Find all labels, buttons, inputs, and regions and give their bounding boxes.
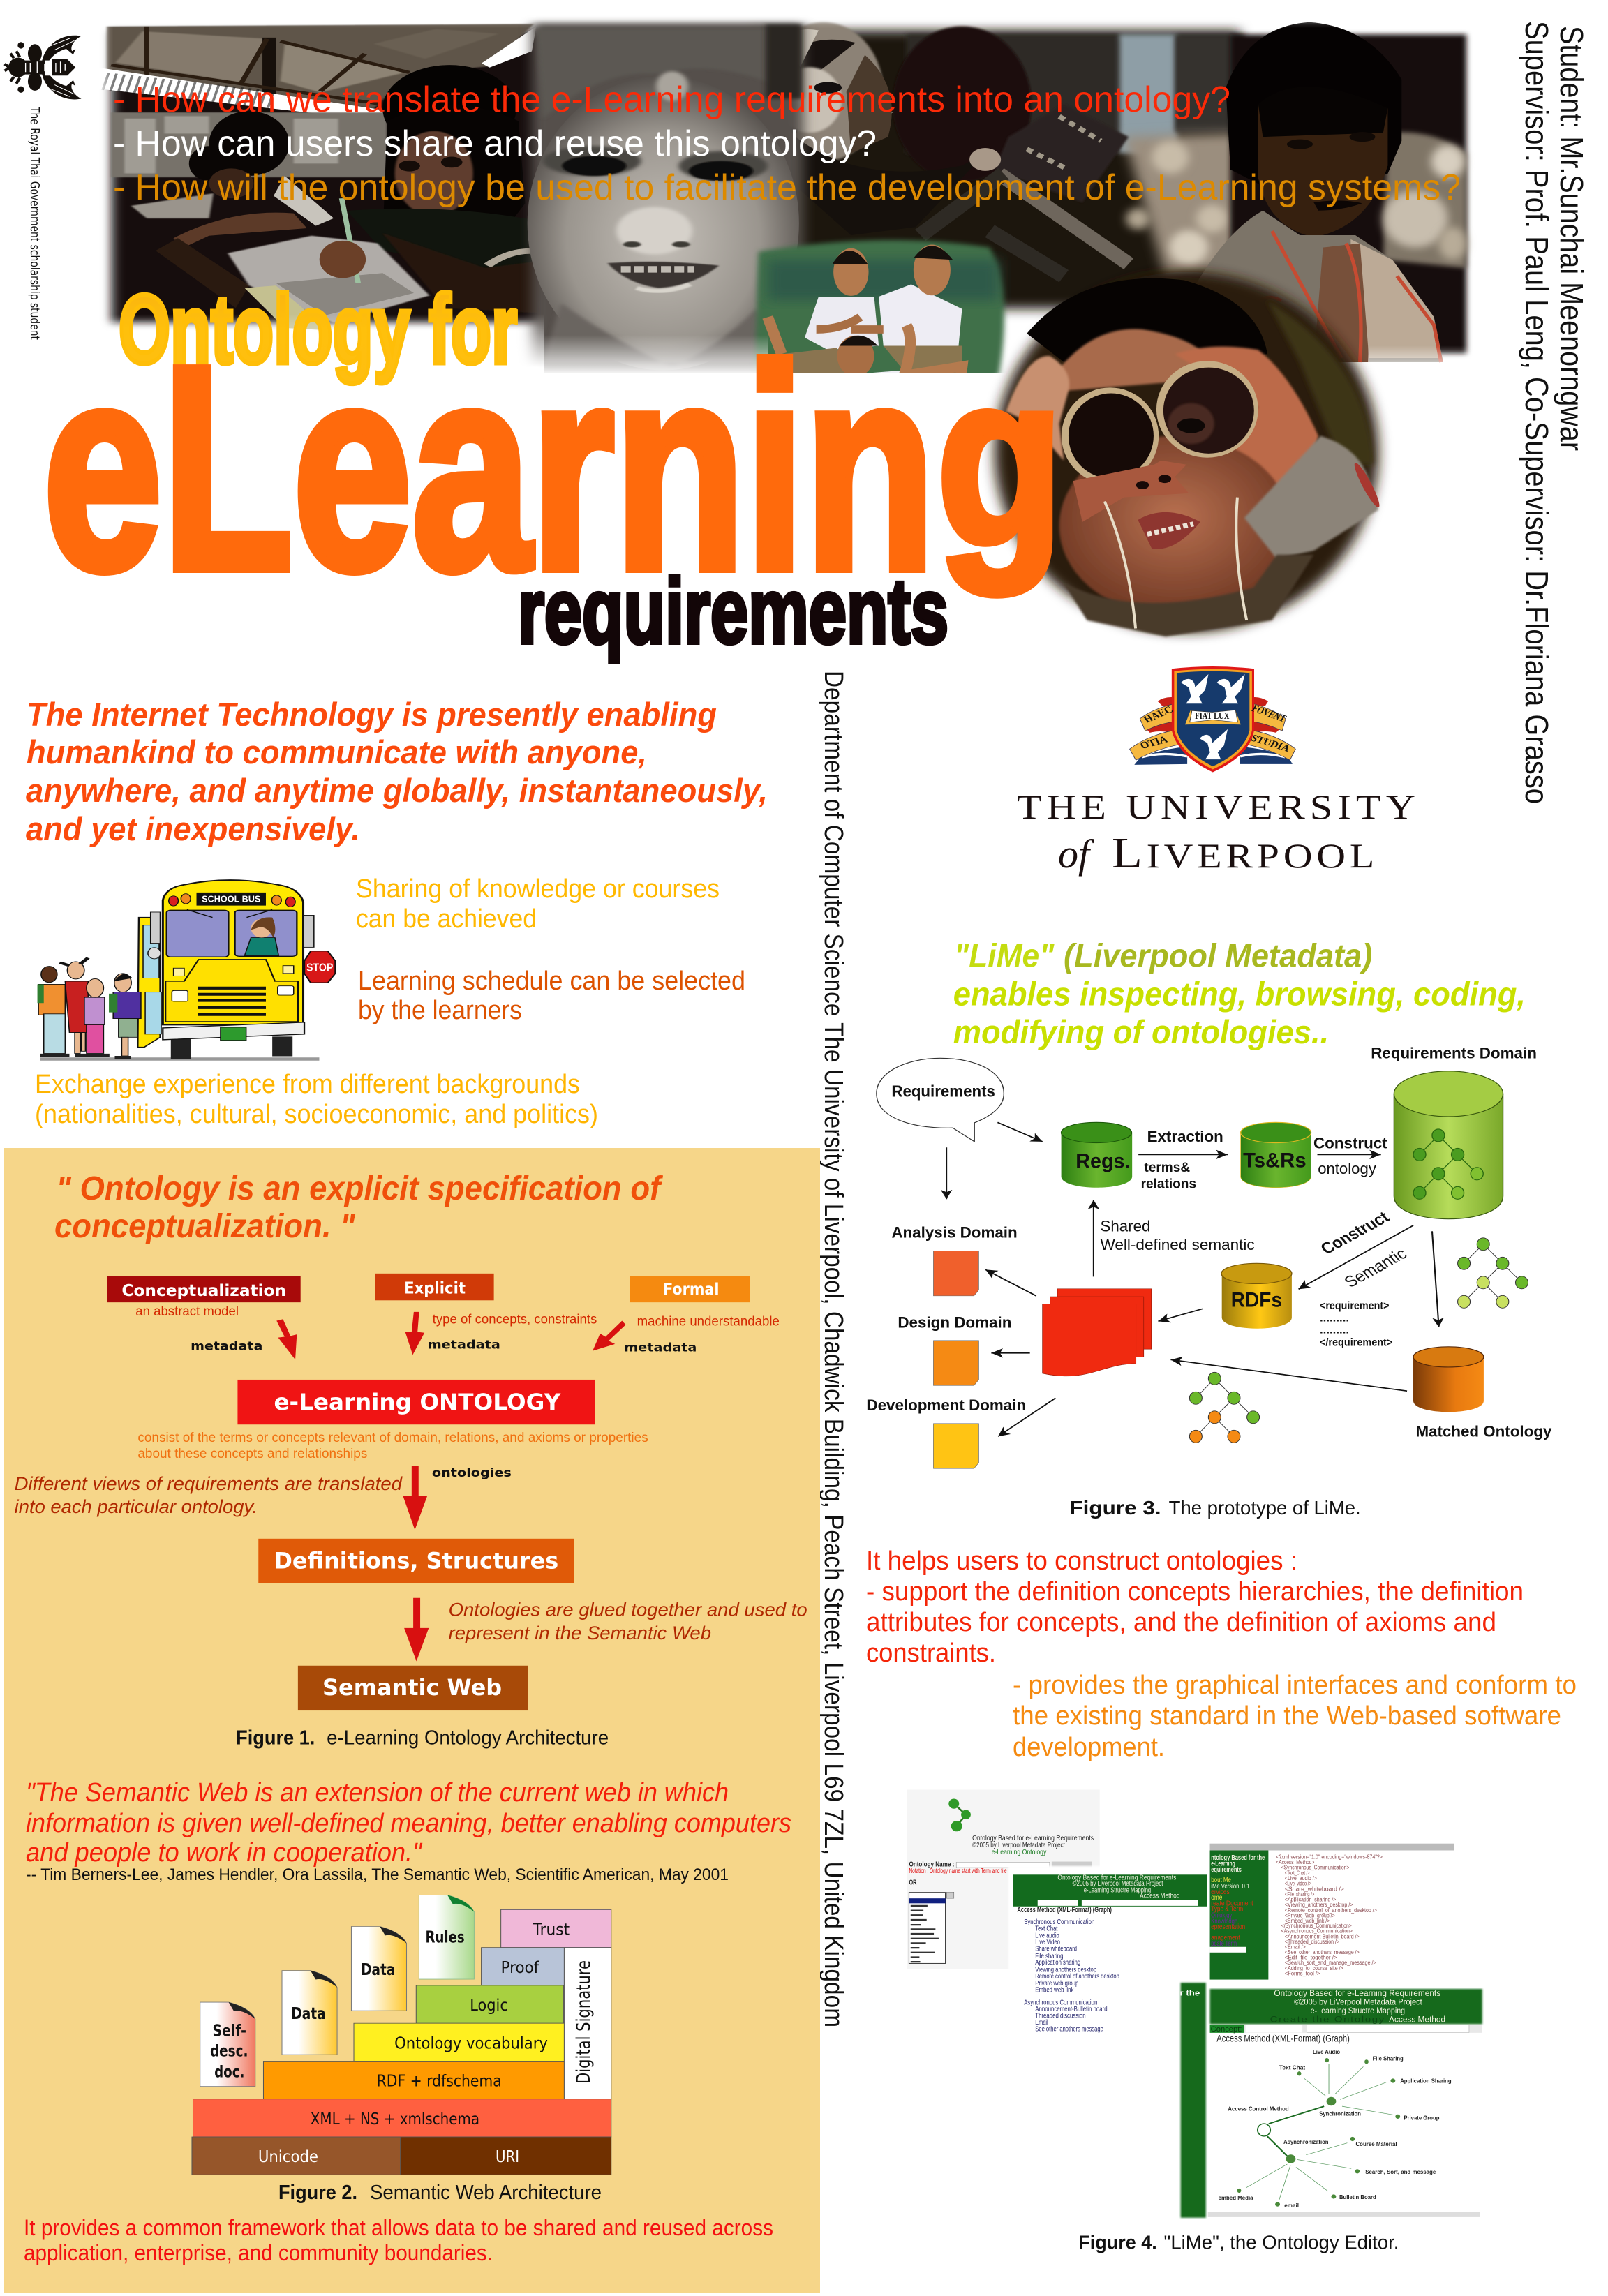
RDF snippet: .........	[1320, 1323, 1349, 1336]
RDF snippet: <requirement>	[1320, 1299, 1389, 1312]
heading: LiMe: modifying of ontologies..	[953, 1014, 1329, 1051]
screenshot: access method list: Threaded discussion	[1035, 2011, 1086, 2020]
benefit: sharing: can be achieved	[356, 904, 537, 934]
screenshot: ontology graph: ©2005 by LiVerpool Metadata Project	[1294, 1997, 1422, 2006]
photo: child with cardboard binoculars	[995, 272, 1383, 636]
screenshot: XML source: anagement	[1211, 1935, 1240, 1941]
intro statement	[26, 696, 768, 847]
metadata labels: ontologies	[432, 1466, 512, 1479]
notes: an abstract model	[135, 1303, 239, 1318]
question: facilitate development: - How will the ontology be used to facilitate the development of e-Learning systems?	[113, 167, 1461, 208]
screenshot: access method list: Email	[1035, 2018, 1048, 2027]
photo: smiling child in the centre	[528, 22, 803, 375]
RDF snippet: .........	[1320, 1311, 1349, 1324]
screenshot: ontology graph: Bulletin Board	[1339, 2194, 1376, 2200]
screenshot: XML source: <Access_Method>	[1276, 1859, 1315, 1866]
screenshot: access method list: Access Method	[1140, 1893, 1179, 1900]
heading: ontology definition: conceptualization. "	[54, 1208, 356, 1245]
intro statement: humankind to communicate with anyone,	[27, 733, 647, 770]
screenshot: XML source: <Edit_file_together />	[1285, 1955, 1337, 1961]
heading: ontology definition: " Ontology is an explicit specification of	[56, 1170, 663, 1207]
screenshot: XML source: Type & Term	[1211, 1906, 1243, 1913]
benefit: schedule: Learning schedule can be selected	[358, 967, 745, 996]
icon: coat of arms	[1130, 666, 1295, 772]
document: data: Data	[361, 1960, 395, 1979]
callout: requirements	[877, 1058, 1004, 1142]
box: definitions, structures: Definitions, Structures	[274, 1548, 558, 1574]
screenshot: XML source: <Adding_to_course_site />	[1285, 1965, 1343, 1971]
author line: student: Student: Mr.Sunchai Meenorngwar	[1554, 26, 1590, 451]
text: helps users construct ontologies: - support the definition concepts hierarchies, the definition	[866, 1577, 1524, 1607]
layers	[192, 1909, 611, 2175]
metadata labels: metadata	[624, 1341, 697, 1355]
illustration: school bus and children: SCHOOL BUS	[202, 894, 260, 904]
document: data	[351, 1926, 406, 2011]
photo: boys group on green background	[754, 240, 1004, 411]
caption: figure 1: Figure 1.	[236, 1727, 315, 1749]
box: e-Learning ontology	[237, 1380, 595, 1424]
wordmark: the university: THE UNIVERSITY	[1017, 787, 1420, 826]
benefit: exchange experience: Exchange experience from different backgrounds	[35, 1070, 580, 1099]
rotated label: semantic: Semantic	[1341, 1245, 1410, 1291]
cylinder: terms and relations: Ts&Rs	[1243, 1149, 1306, 1172]
screenshot: access method list: Live audio	[1035, 1931, 1059, 1939]
screenshot: XML source: <Forms_tool />	[1285, 1970, 1320, 1977]
screenshot: ontology graph: File Sharing	[1373, 2056, 1404, 2062]
panel: ontology and semantic web	[4, 1148, 820, 2293]
figure 4: LiMe editor screenshots	[907, 1790, 1482, 2253]
screenshot: XML source: <Share_whiteboard />	[1285, 1886, 1344, 1893]
intro statement: and yet inexpensively.	[26, 810, 360, 847]
regular labels: ontology	[1318, 1160, 1376, 1177]
screenshot: ontology graph: Asynchronization	[1283, 2139, 1329, 2145]
text: helps users construct ontologies	[866, 1546, 1524, 1668]
caption: figure 2: Figure 2.	[278, 2182, 357, 2204]
author line: supervisors: Supervisor: Prof. Paul Leng, Co-Supervisor: Dr.Floriana Grasso	[1519, 21, 1555, 804]
tree: semantic	[1458, 1238, 1528, 1308]
screenshot: ontology graph: Course Material	[1355, 2141, 1397, 2147]
layer labels: Trust	[533, 1921, 570, 1939]
screenshot: access method list: See other anothers message	[1035, 2025, 1103, 2033]
screenshot: ontology graph: Search, Sort, and message	[1365, 2169, 1436, 2175]
screenshot: ontology graph: Access Control Method	[1228, 2105, 1289, 2112]
intro statement: The Internet Technology is presently enabling	[27, 696, 717, 733]
document: self-desc	[200, 2002, 255, 2087]
intro statement: anywhere, and anytime globally, instantaneously,	[26, 772, 768, 809]
regular labels	[1101, 1160, 1376, 1254]
RDF snippet: </requirement>	[1320, 1336, 1392, 1348]
children	[38, 984, 65, 1015]
page: design domain	[933, 1341, 978, 1385]
screenshot: XML source: <?xml version="1.0" encoding="windows-874"?>	[1276, 1854, 1383, 1861]
caption: figure 2: Semantic Web Architecture	[370, 2182, 602, 2204]
screenshot: XML source: Knowledge	[1211, 1918, 1237, 1925]
benefit: sharing	[356, 874, 720, 934]
bus body	[163, 880, 304, 1024]
icon: coat of arms: FOVENT	[1250, 703, 1288, 724]
layer labels: URI	[496, 2147, 519, 2166]
box: e-Learning ontology: e-Learning ONTOLOGY	[274, 1389, 561, 1415]
box: formal	[630, 1276, 750, 1302]
page: analysis domain	[933, 1251, 978, 1296]
screenshot: ontology graph: Concept:	[1211, 2025, 1242, 2034]
screenshot: XML source: <File_sharing />	[1285, 1891, 1315, 1898]
screenshot: XML source: <Live_audio />	[1285, 1875, 1317, 1881]
cylinder: requirements domain	[1394, 1071, 1503, 1219]
screenshot: access method list: Live Video	[1035, 1938, 1060, 1946]
layer label: digital signature: Digital Signature	[573, 1960, 595, 2084]
screenshot: ontology graph: email	[1284, 2202, 1299, 2209]
screenshot: access method list: Access Method (XML-Format) (Graph)	[1017, 1905, 1112, 1914]
graph edges	[1246, 2064, 1394, 2200]
screenshot: XML source: </Synchronous_Communication>	[1281, 1923, 1352, 1930]
screenshot: access method list: e-Learning Structre Mapping	[1084, 1886, 1151, 1894]
layer labels: Logic	[470, 1996, 508, 2015]
caption: figure 4: Figure 4.	[1078, 2231, 1157, 2253]
benefit: exchange experience	[35, 1070, 598, 1129]
University of Liverpool logo	[1017, 666, 1420, 877]
screenshot: ontology graph: Text Chat	[1279, 2065, 1305, 2071]
document: self-desc: Self-	[213, 2021, 246, 2040]
screenshot: access method list: File sharing	[1035, 1951, 1063, 1960]
note: ontologies glued: represent in the Semantic Web	[449, 1622, 711, 1643]
document: self-desc: doc.	[214, 2062, 244, 2082]
diagram labels: Requirements Domain	[1371, 1045, 1537, 1062]
screenshot: ontology graph: embed Media	[1219, 2195, 1253, 2201]
box: explicit: Explicit	[404, 1279, 466, 1297]
diagram labels: relations	[1141, 1177, 1196, 1191]
screenshot: XML source	[1210, 1838, 1454, 1980]
screenshot: start page: OR	[909, 1879, 916, 1886]
semantic web quote	[26, 1778, 791, 1868]
photo: camera child and dark middle	[754, 22, 1244, 309]
bus door	[137, 918, 161, 1048]
illustration: school bus and children	[38, 880, 335, 1061]
screenshot: ontology graph: Access Method	[1389, 2015, 1445, 2024]
screenshot: access method list: Synchronous Communication	[1024, 1918, 1094, 1926]
screenshot: XML source: ntology Based for the	[1211, 1854, 1265, 1861]
document: self-desc: desc.	[210, 2042, 248, 2061]
ontology description: consist of the terms or concepts relevant of domain, relations, and axioms or properties	[137, 1429, 648, 1445]
screenshot: ontology graph: Private Group	[1404, 2115, 1440, 2121]
diagram labels: terms&	[1144, 1160, 1190, 1175]
layer labels: RDF + rdfschema	[377, 2072, 502, 2091]
screenshot: XML source: <Synchronous_Communication>	[1281, 1865, 1350, 1871]
diagram labels: Design Domain	[898, 1314, 1011, 1332]
wordmark: of liverpool: of	[1058, 831, 1094, 877]
illustration: school bus and children: STOP	[306, 961, 333, 974]
title: eLearning: g	[937, 324, 1064, 596]
screenshot: ontology graph: r the	[1180, 1989, 1200, 1997]
title: eLearning: eLearnin	[43, 306, 935, 629]
arrows	[946, 1122, 1439, 1436]
icon: coat of arms: STUDIA	[1249, 732, 1292, 754]
figure 2: semantic web layer cake	[192, 1895, 611, 2175]
screenshot: start page: Ontology Name :	[909, 1861, 954, 1868]
callout: requirements: Requirements	[891, 1082, 995, 1101]
screenshot: XML source: Ontology	[1211, 1912, 1232, 1919]
heading: LiMe	[953, 938, 1526, 1051]
text: helps users construct ontologies: constraints.	[866, 1639, 996, 1668]
tree: matched	[1189, 1372, 1260, 1443]
label: scholarship: The Royal Thai Government scholarship student	[27, 106, 42, 340]
title: Ontology for: Ontology for	[119, 274, 517, 384]
screenshot: XML source: ome	[1211, 1894, 1222, 1902]
screenshot: ontology graph: Application Sharing	[1400, 2078, 1452, 2084]
cylinder: RDFs	[1221, 1263, 1292, 1329]
note: ontologies glued: Ontologies are glued together and used to	[449, 1599, 807, 1620]
diagram labels: Construct	[1313, 1135, 1387, 1152]
screenshot: start page: Ontology Based for e-Learning Requirements	[972, 1835, 1094, 1842]
screenshot: start page	[907, 1790, 1100, 1969]
page: development domain	[933, 1424, 978, 1468]
screenshot: access method list: Text Chat	[1035, 1924, 1058, 1932]
screenshot: XML source: reate Document	[1211, 1900, 1253, 1907]
caption: figure 4: "LiMe", the Ontology Editor.	[1164, 2231, 1399, 2253]
screenshot: ontology graph	[1178, 1981, 1482, 2218]
wordmark: of liverpool: LIVERPOOL	[1112, 830, 1378, 877]
text: helps users construct ontologies: It helps users to construct ontologies :	[866, 1546, 1297, 1576]
note: different views: Different views of requirements are translated	[15, 1473, 403, 1494]
icon: Thai Garuda emblem	[5, 36, 82, 99]
screenshot: XML source: <Threaded_discussion />	[1285, 1939, 1339, 1945]
screenshot: XML source: <Live_video />	[1285, 1881, 1311, 1887]
icon: coat of arms: OTIA	[1138, 733, 1170, 751]
cylinder: matched ontology	[1413, 1347, 1484, 1412]
diagram labels: Analysis Domain	[891, 1224, 1018, 1242]
stack of red documents	[1043, 1289, 1152, 1376]
icon: coat of arms: HAEC	[1141, 703, 1175, 725]
arrows to ontology	[276, 1312, 626, 1359]
heading: ontology definition	[54, 1170, 663, 1245]
caption: figure 4	[1078, 2231, 1399, 2253]
ontology description	[137, 1429, 648, 1461]
screenshot: access method list: Share whiteboard	[1035, 1944, 1077, 1953]
layer labels: Proof	[501, 1958, 539, 1977]
RDF snippet	[1320, 1299, 1392, 1348]
screenshot: XML source: <Embed_web_link />	[1285, 1918, 1330, 1925]
diagram labels	[866, 1045, 1551, 1440]
soft white feathering of photo edges	[77, 0, 1535, 436]
screenshot: access method list: ©2005 by Liverpool Metadata Project	[1073, 1880, 1163, 1888]
screenshot: start page: e-Learning Ontology	[992, 1849, 1047, 1856]
screenshot: ontology graph: Create the Ontology	[1270, 2015, 1385, 2024]
figure 3: LiMe prototype	[866, 938, 1551, 1519]
benefit: exchange experience: (nationalities, cultural, socioeconomic, and politics)	[35, 1100, 598, 1129]
semantic web quote: and people to work in cooperation."	[26, 1838, 422, 1868]
tree in cylinder	[1413, 1129, 1483, 1199]
layer labels: Ontology vocabulary	[394, 2034, 548, 2052]
metadata labels: metadata	[191, 1339, 262, 1353]
ontology description: about these concepts and relationships	[137, 1445, 367, 1461]
caption: figure 3: Figure 3.	[1069, 1497, 1161, 1519]
layer labels	[258, 1921, 570, 2166]
screenshot: start page: Notation : Ontology name start with Term and file	[909, 1868, 1007, 1875]
screenshot: ontology graph: e-Learning Structre Mapping	[1311, 2006, 1405, 2015]
text: graphical interfaces: - provides the graphical interfaces and conform to	[1013, 1671, 1577, 1700]
caption: figure 2	[278, 2182, 602, 2204]
notes: machine understandable	[637, 1313, 780, 1329]
screenshot: ontology graph: Live Audio	[1313, 2049, 1340, 2055]
document: rules	[419, 1895, 474, 1979]
text: graphical interfaces: development.	[1013, 1733, 1165, 1762]
arrow down to semantic web	[404, 1598, 429, 1661]
box: explicit	[375, 1274, 494, 1300]
screenshot: access method list: Asynchronous Communication	[1024, 1998, 1097, 2006]
screenshot: ontology graph: Ontology Based for e-Learning Requirements	[1274, 1988, 1440, 1997]
statement: common framework	[24, 2215, 773, 2265]
cylinder: RDFs: RDFs	[1231, 1288, 1282, 1311]
box: formal: Formal	[663, 1281, 719, 1299]
screenshot: XML source: pdate Term	[1211, 1940, 1237, 1948]
screenshot: XML source: iMe Version. 0.1	[1211, 1883, 1249, 1891]
regular labels: Shared	[1101, 1218, 1150, 1235]
screenshot: start page: ©2005 by Liverpool Metadata Project	[972, 1842, 1065, 1849]
metadata labels: metadata	[428, 1338, 500, 1352]
screenshot: access method list: Remote control of anothers desktop	[1035, 1972, 1119, 1981]
question: share and reuse: - How can users share and reuse this ontology?	[113, 124, 877, 164]
screenshot: XML source: ervices	[1211, 1888, 1230, 1896]
photo: girl at right	[1191, 22, 1466, 362]
title: requirements: requirements	[518, 560, 948, 662]
caption: figure 3	[1069, 1497, 1361, 1519]
screenshot: XML source: equirements	[1211, 1866, 1242, 1873]
text: graphical interfaces: the existing standard in the Web-based software	[1013, 1701, 1561, 1731]
screenshot: access method list: Viewing anothers desktop	[1035, 1965, 1096, 1974]
figure 1: e-Learning ontology architecture	[15, 1170, 807, 1749]
semantic web quote: information is given well-defined meaning, better enabling computers	[26, 1809, 791, 1838]
notes: type of concepts, constraints	[433, 1311, 597, 1327]
document: rules: Rules	[426, 1928, 465, 1947]
screenshot: XML source: <Asynchronous_Communication>	[1281, 1928, 1353, 1935]
box: semantic web	[298, 1666, 528, 1710]
semantic web quote: "The Semantic Web is an extension of the current web in which	[26, 1778, 729, 1807]
caption: figure 1: e-Learning Ontology Architecture	[327, 1727, 609, 1749]
screenshot: access method list	[1008, 1866, 1212, 2043]
screenshot: XML source: <Email />	[1285, 1944, 1306, 1951]
hood and grille	[165, 960, 298, 1022]
box: conceptualization	[107, 1276, 301, 1302]
heading: LiMe: (Liverpool Metadata)	[1064, 938, 1372, 974]
text: graphical interfaces	[1013, 1671, 1577, 1762]
metadata labels	[191, 1338, 697, 1479]
box: definitions, structures	[258, 1539, 574, 1583]
screenshot: XML source: epresentation	[1211, 1923, 1245, 1930]
screenshot: access method list: Private web group	[1035, 1979, 1079, 1988]
screenshot: XML source: bout Me	[1211, 1877, 1231, 1884]
text: helps users construct ontologies: attributes for concepts, and the definition of axioms and	[866, 1608, 1496, 1637]
diagram labels: Matched Ontology	[1415, 1423, 1551, 1440]
note: different views	[15, 1473, 403, 1517]
screenshot: XML source: <Remote_control_of_anothers_desktop />	[1285, 1907, 1377, 1914]
statement: common framework: It provides a common framework that allows data to be shared and reused across	[24, 2215, 773, 2240]
cylinder: regs: Regs.	[1075, 1149, 1130, 1172]
bumper and wheels	[171, 1039, 191, 1059]
screenshot: ontology graph: Access Method (XML-Format) (Graph)	[1216, 2034, 1350, 2044]
stop sign	[304, 951, 335, 983]
screenshot: access method list: Application sharing	[1035, 1958, 1080, 1967]
notes	[135, 1303, 780, 1329]
screenshot: XML source: <Search_sort_and_manage_message />	[1285, 1960, 1376, 1967]
layer labels: Unicode	[258, 2147, 318, 2166]
document: data	[282, 1971, 337, 2055]
photo: classroom, children writing	[98, 24, 547, 330]
cylinder: regs	[1062, 1122, 1132, 1188]
cylinder: terms and relations	[1241, 1122, 1311, 1188]
icon: coat of arms: FIAT LUX	[1195, 710, 1229, 721]
document: data: Data	[291, 2004, 326, 2023]
screenshot: XML source: <Text_Chat />	[1285, 1870, 1310, 1877]
screenshot: XML source: <Announcement-Bulletin_board />	[1285, 1933, 1360, 1940]
citation: -- Tim Berners-Lee, James Hendler, Ora Lassila, The Semantic Web, Scientific American, May 2001	[26, 1865, 729, 1884]
layer labels: XML + NS + xmlschema	[311, 2110, 479, 2129]
department address: Department of Computer Science The University of Liverpool, Chadwick Building, Peach Street, Liverpool L69 7ZL, United Kingdom	[819, 671, 848, 2027]
benefit: schedule: by the learners	[358, 996, 522, 1025]
box: semantic web: Semantic Web	[322, 1675, 502, 1701]
screenshot: XML source: e-Learning	[1211, 1861, 1235, 1868]
screenshot: XML source: <Viewing_anothers_desktop />	[1285, 1902, 1353, 1909]
benefit: schedule	[358, 967, 745, 1025]
diagram labels: Development Domain	[866, 1397, 1026, 1415]
statement: common framework: application, enterprise, and community boundaries.	[24, 2240, 493, 2265]
heading: LiMe: "LiMe"	[954, 938, 1055, 974]
caption: figure 3: The prototype of LiMe.	[1169, 1497, 1361, 1519]
screenshot: XML source: <See_other_anothers_message />	[1285, 1949, 1360, 1956]
note: ontologies glued	[449, 1599, 807, 1643]
arrow down to definitions	[403, 1466, 427, 1530]
question: translate requirements: - How can we translate the e-Learning requirements into an ontology?	[113, 80, 1230, 120]
screenshot: access method list: Announcement-Bulletin board	[1035, 2005, 1108, 2013]
box: conceptualization: Conceptualization	[121, 1282, 286, 1300]
diagram labels: Extraction	[1147, 1128, 1223, 1145]
note: different views: into each particular ontology.	[15, 1496, 258, 1517]
caption: figure 1	[236, 1727, 609, 1749]
regular labels: Well-defined semantic	[1101, 1237, 1255, 1254]
rotated label: construct: Construct	[1317, 1208, 1393, 1258]
screenshot: ontology graph: Synchronization	[1319, 2111, 1361, 2117]
screenshot: XML source: <Application_sharing />	[1285, 1897, 1337, 1903]
screenshot: access method list: Embed web link	[1035, 1985, 1073, 1994]
screenshot: access method list: Ontology Based for e-Learning Requirements	[1057, 1874, 1177, 1881]
hero photo collage	[77, 0, 1535, 636]
benefit: sharing: Sharing of knowledge or courses	[356, 874, 720, 904]
screenshot: XML source: <Private_web_group />	[1285, 1912, 1335, 1919]
